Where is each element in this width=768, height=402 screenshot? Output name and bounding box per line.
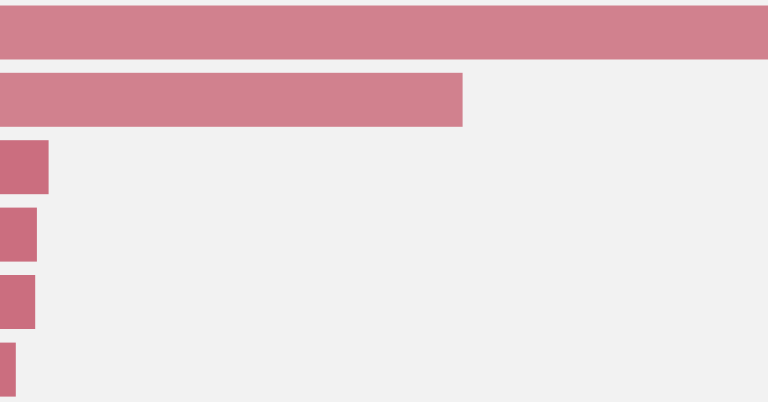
bar 4: [0, 208, 37, 262]
bar 2: [0, 73, 463, 127]
bar 5: [0, 275, 35, 329]
bar 6: [0, 343, 16, 397]
bar 3: [0, 140, 49, 194]
bar 1: [0, 6, 768, 60]
